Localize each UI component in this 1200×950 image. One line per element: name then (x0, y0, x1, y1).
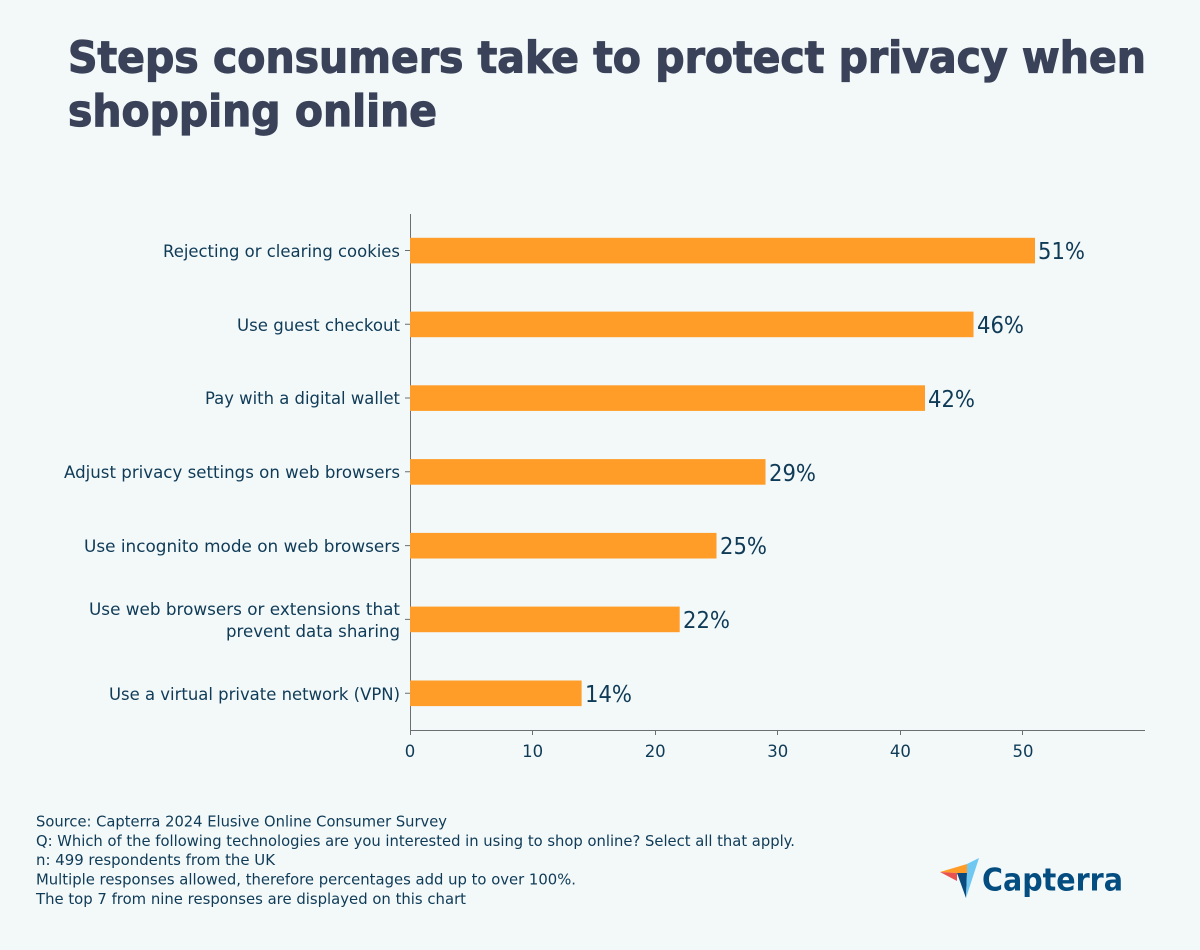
x axis labels: 30 (767, 742, 788, 761)
x axis labels: 20 (645, 742, 666, 761)
category labels: Use guest checkout (237, 316, 400, 336)
category labels: Use a virtual private network (VPN) (109, 685, 400, 705)
value labels: 29% (769, 461, 816, 487)
category labels (64, 242, 400, 705)
bars (410, 238, 1035, 706)
source notes: Multiple responses allowed, therefore percentages add up to over 100%. (36, 870, 576, 888)
title: Steps consumers take to protect privacy when (68, 34, 1146, 84)
source notes: n: 499 respondents from the UK (36, 851, 276, 869)
x axis labels: 10 (522, 742, 543, 761)
title: shopping online (68, 87, 437, 137)
chart axes (405, 214, 1145, 735)
category labels: Rejecting or clearing cookies (163, 242, 400, 262)
category labels: Pay with a digital wallet (205, 389, 400, 409)
bar chart (64, 214, 1145, 761)
value labels (585, 239, 1085, 708)
value labels: 51% (1038, 239, 1085, 265)
x axis labels: 0 (405, 742, 415, 761)
x axis labels: 40 (890, 742, 911, 761)
value labels: 22% (683, 608, 730, 634)
Capterra logo (940, 858, 1123, 898)
source notes (35, 812, 795, 908)
category labels: Adjust privacy settings on web browsers (64, 463, 400, 483)
source notes: Q: Which of the following technologies are you interested in using to shop online? Select all that apply. (36, 832, 795, 850)
x axis labels: 50 (1012, 742, 1034, 761)
title (68, 34, 1146, 137)
x axis labels (405, 742, 1034, 761)
category labels: prevent data sharing (226, 622, 400, 642)
icon: Capterra arrow (940, 858, 979, 898)
value labels: 42% (928, 387, 975, 413)
value labels: 46% (977, 313, 1024, 339)
category labels: Use web browsers or extensions that (89, 600, 400, 620)
source notes: Source: Capterra 2024 Elusive Online Consumer Survey (36, 812, 447, 830)
logo wordmark: Capterra (982, 862, 1123, 898)
source notes: The top 7 from nine responses are displayed on this chart (35, 890, 466, 908)
category labels: Use incognito mode on web browsers (84, 537, 400, 557)
value labels: 14% (585, 682, 632, 708)
value labels: 25% (720, 534, 767, 560)
